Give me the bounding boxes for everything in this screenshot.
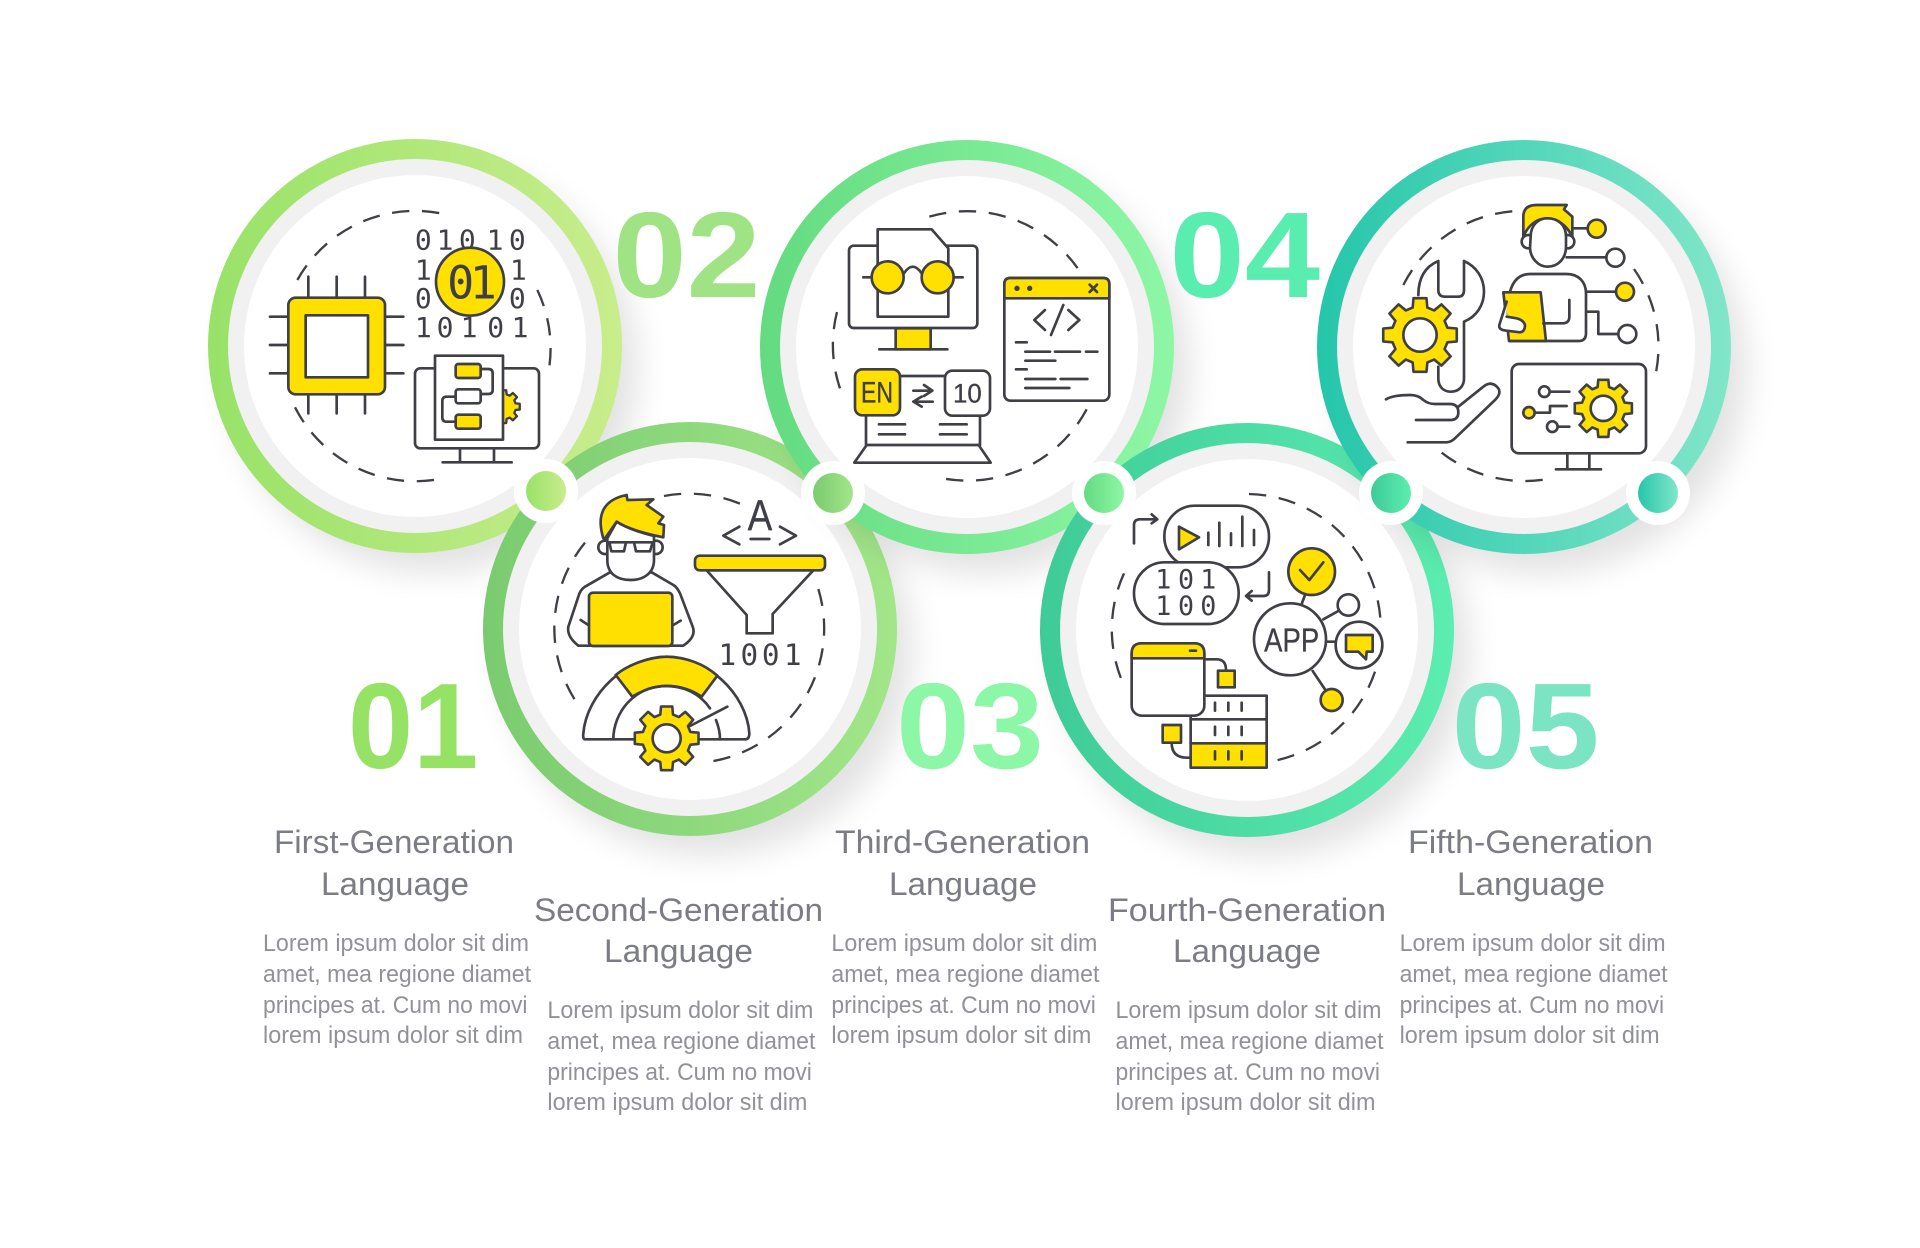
body 2: amet, mea regione diamet — [547, 1028, 816, 1055]
icon: chip, binary and flowchart monitor: 01010 — [415, 223, 526, 256]
body 5: Lorem ipsum dolor sit dim — [1400, 930, 1666, 957]
body 4: principes at. Cum no movi — [1116, 1059, 1380, 1086]
text block: first generation — [263, 824, 531, 1049]
icon: programmer, funnel and gauge: 1001 — [718, 638, 801, 672]
text block: fifth generation — [1400, 824, 1668, 1049]
panel: circle 4 fourth generation — [1040, 423, 1470, 857]
body 4: lorem ipsum dolor sit dim — [1116, 1089, 1376, 1116]
body 2: lorem ipsum dolor sit dim — [547, 1089, 807, 1116]
heading 1 — [274, 824, 514, 902]
body 1: lorem ipsum dolor sit dim — [263, 1022, 523, 1049]
heading 4 — [1108, 892, 1386, 969]
heading 2 — [534, 892, 823, 969]
connector dots — [514, 459, 1690, 525]
circle 5 ring — [1317, 140, 1747, 574]
text block: second generation — [534, 892, 823, 1116]
body 5: principes at. Cum no movi — [1400, 992, 1664, 1019]
body 3: amet, mea regione diamet — [831, 961, 1100, 988]
circle 2 ring — [483, 422, 913, 856]
heading 4: Language — [1173, 933, 1321, 969]
panel: circle 3 third generation — [760, 140, 1190, 574]
body 3: lorem ipsum dolor sit dim — [831, 1022, 1091, 1049]
icon: document reader, code window and translator laptop: 10 — [953, 378, 982, 408]
body 5: lorem ipsum dolor sit dim — [1400, 1022, 1660, 1049]
body 1: amet, mea regione diamet — [263, 961, 531, 988]
body 5 — [1400, 930, 1668, 1049]
body 2: Lorem ipsum dolor sit dim — [547, 997, 813, 1024]
body 4 — [1116, 997, 1384, 1116]
icon: media, binary, app network and server: 101 — [1155, 564, 1216, 595]
circle 1 ring — [208, 139, 638, 573]
heading 2: Second-Generation — [534, 892, 823, 928]
body 4: Lorem ipsum dolor sit dim — [1116, 997, 1382, 1024]
dot 1 — [514, 459, 578, 523]
body 3: principes at. Cum no movi — [831, 992, 1096, 1019]
icon: chip, binary and flowchart monitor: 0 — [509, 282, 526, 315]
heading 3: Language — [889, 866, 1037, 902]
text block: third generation — [831, 824, 1100, 1049]
dot 4 — [1359, 461, 1423, 525]
icon: chip, binary and flowchart monitor: 01 — [447, 256, 497, 309]
number 04: 04 — [1170, 187, 1320, 324]
heading 5 — [1408, 824, 1653, 902]
dot 3 — [1072, 461, 1136, 525]
number 05: 05 — [1452, 658, 1600, 795]
body 1: Lorem ipsum dolor sit dim — [263, 930, 529, 957]
heading 3: Third-Generation — [835, 824, 1090, 860]
heading 5: Fifth-Generation — [1408, 824, 1653, 860]
number 01: 01 — [348, 659, 478, 795]
circle 3 ring — [760, 140, 1190, 574]
body 1: principes at. Cum no movi — [263, 992, 528, 1019]
body 3 — [831, 930, 1100, 1049]
panel: circle 2 second generation — [483, 422, 913, 856]
circle 4 ring — [1040, 423, 1470, 857]
icon: media, binary, app network and server: 100 — [1155, 591, 1216, 622]
body 5: amet, mea regione diamet — [1400, 961, 1668, 988]
body 1 — [263, 930, 531, 1049]
icon: chip, binary and flowchart monitor: 0 — [415, 282, 432, 315]
icon: document reader, code window and translator laptop — [833, 211, 1109, 481]
dot 5 — [1626, 461, 1690, 525]
body 2 — [547, 997, 816, 1116]
body 4: amet, mea regione diamet — [1116, 1028, 1384, 1055]
icon: engineer, wrench gear and monitor — [1383, 205, 1658, 481]
panel: circle 1 first generation — [208, 139, 638, 573]
heading 3 — [835, 824, 1090, 902]
icon: chip, binary and flowchart monitor: 1 — [510, 253, 527, 286]
heading 5: Language — [1457, 866, 1605, 902]
body 2: principes at. Cum no movi — [547, 1059, 812, 1086]
heading 1: First-Generation — [274, 824, 514, 860]
panel: circle 5 fifth generation — [1317, 140, 1747, 574]
icon: media, binary, app network and server: APP — [1264, 623, 1319, 660]
icon: chip, binary and flowchart monitor — [270, 211, 551, 481]
icon: chip, binary and flowchart monitor: 10101 — [415, 311, 528, 344]
heading 2: Language — [604, 933, 753, 969]
icon: programmer, funnel and gauge — [554, 493, 825, 770]
heading 4: Fourth-Generation — [1108, 892, 1386, 928]
icon: document reader, code window and translator laptop: EN — [861, 376, 893, 409]
number 03: 03 — [896, 658, 1044, 795]
icon: chip, binary and flowchart monitor: 1 — [415, 253, 432, 286]
icon: media, binary, app network and server — [1112, 494, 1382, 768]
body 3: Lorem ipsum dolor sit dim — [831, 930, 1097, 957]
dot 2 — [801, 461, 865, 525]
number 02: 02 — [613, 187, 761, 324]
text block: fourth generation — [1108, 892, 1386, 1116]
icon: programmer, funnel and gauge: A — [748, 493, 772, 541]
heading 1: Language — [321, 866, 469, 902]
